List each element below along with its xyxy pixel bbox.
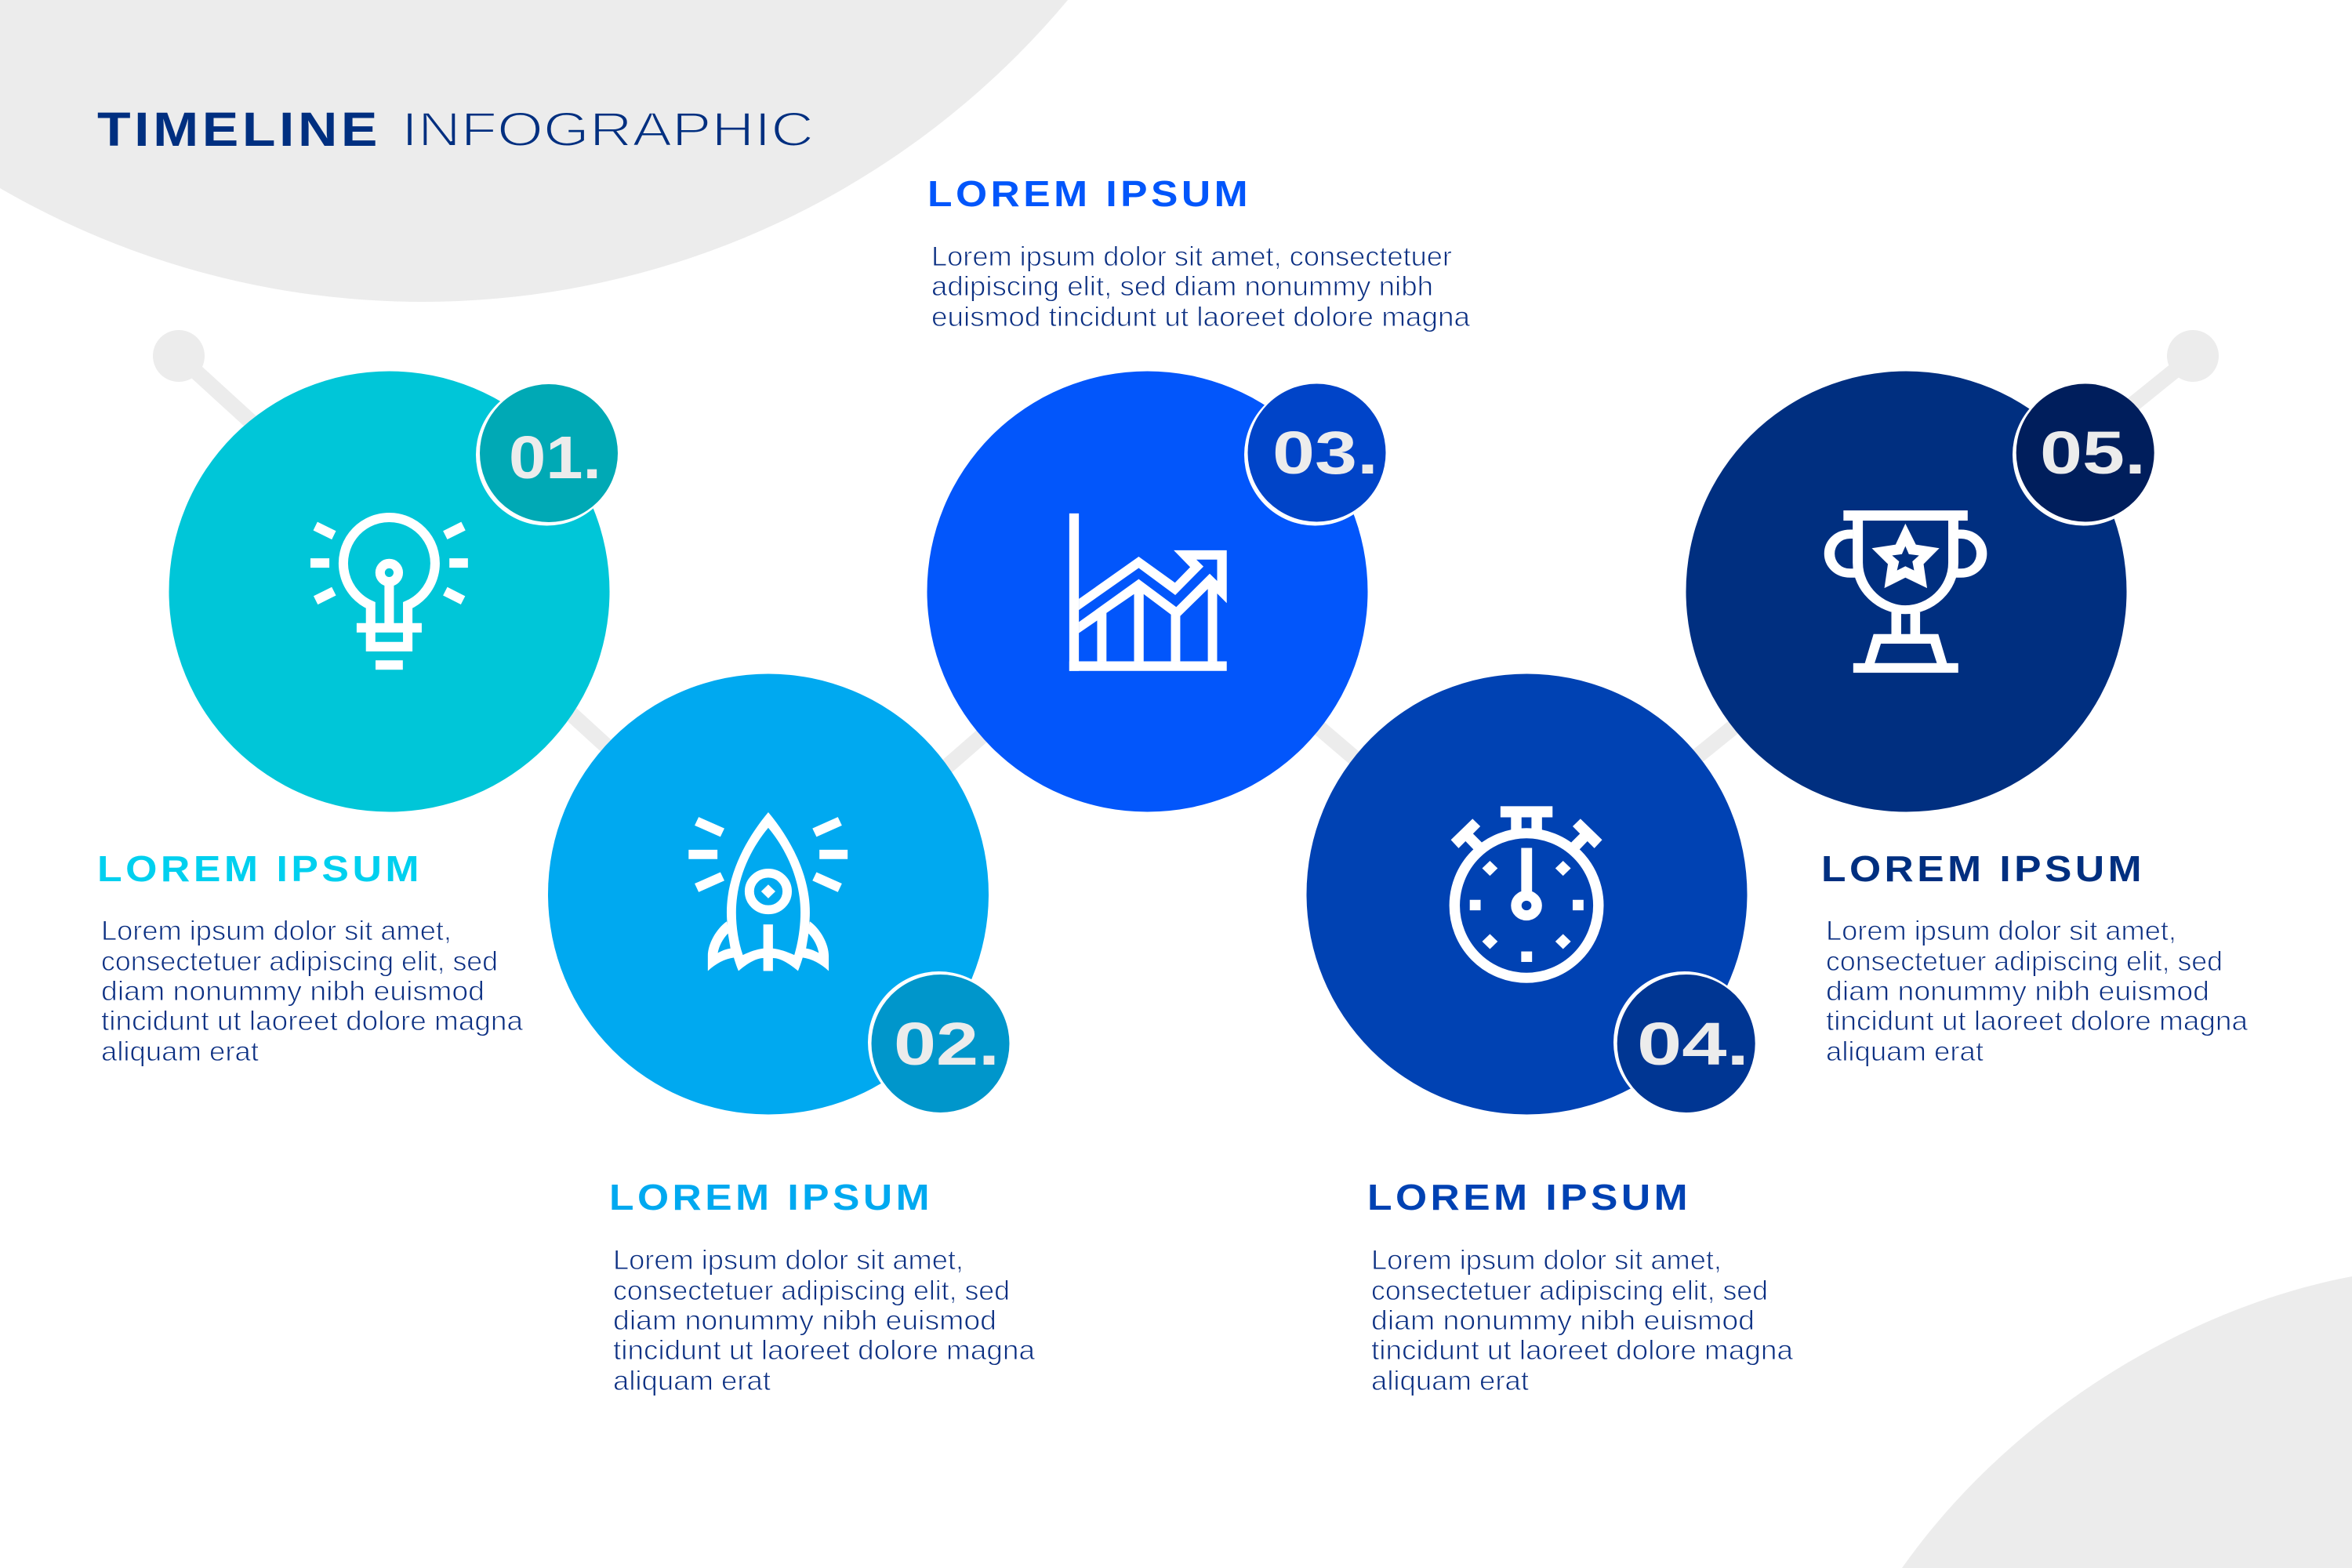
text block: step 4: tincidunt ut laoreet dolore magna: [1371, 1335, 1794, 1366]
badge 04: 04.: [1637, 1011, 1749, 1078]
text block: step 4: Lorem ipsum dolor sit amet,: [1371, 1245, 1722, 1276]
text block: step 2: tincidunt ut laoreet dolore magna: [613, 1335, 1036, 1366]
step 3 circle: [927, 372, 1367, 812]
icon: light bulb: [310, 517, 468, 665]
title: INFOGRAPHIC: [401, 103, 814, 156]
text block: step 2: LOREM IPSUM: [609, 1177, 933, 1218]
text block: step 4: LOREM IPSUM: [1367, 1177, 1691, 1218]
text block: step 3: Lorem ipsum dolor sit amet, consectetuer: [931, 241, 1452, 272]
panel: step 5: [1686, 372, 2154, 812]
text block: step 3: adipiscing elit, sed diam nonummy nibh: [931, 271, 1433, 302]
step 5 circle: [1686, 372, 2126, 812]
badge 01: 01.: [509, 424, 601, 492]
text block: step 5: consectetuer adipiscing elit, sed: [1826, 946, 2223, 977]
badge 02: 02.: [894, 1011, 1000, 1078]
text block: step 1: tincidunt ut laoreet dolore magna: [101, 1006, 524, 1036]
text block: step 1: [97, 848, 524, 1067]
text block: step 5: aliquam erat: [1826, 1036, 1984, 1067]
panel: step 2: [548, 674, 1010, 1115]
text block: step 3: [927, 173, 1471, 332]
badge 02: [868, 971, 1010, 1113]
text block: step 5: LOREM IPSUM: [1821, 848, 2145, 889]
text block: step 3: LOREM IPSUM: [927, 173, 1251, 214]
text block: step 1: LOREM IPSUM: [97, 848, 423, 889]
icon: growth chart: [1069, 514, 1227, 671]
text block: step 5: diam nonummy nibh euismod: [1826, 976, 2209, 1007]
title: TIMELINE: [97, 103, 381, 156]
icon: stopwatch: [1451, 806, 1602, 978]
text block: step 2: consectetuer adipiscing elit, sed: [613, 1276, 1010, 1306]
badge 04: [1613, 971, 1755, 1113]
badge 03: [1244, 384, 1386, 525]
step 1 circle: [169, 372, 610, 812]
badge 05: 05.: [2040, 419, 2146, 487]
background shape: top left: [0, 0, 1068, 302]
text block: step 4: consectetuer adipiscing elit, sed: [1371, 1276, 1768, 1306]
text block: step 1: aliquam erat: [101, 1036, 259, 1067]
step 2 circle: [548, 674, 989, 1115]
badge 03: 03.: [1272, 419, 1378, 487]
text block: step 3: euismod tincidunt ut laoreet dolore magna: [931, 302, 1471, 332]
text block: step 4: diam nonummy nibh euismod: [1371, 1305, 1755, 1336]
title: [97, 103, 814, 156]
text block: step 5: [1821, 848, 2249, 1067]
text block: step 2: Lorem ipsum dolor sit amet,: [613, 1245, 964, 1276]
icon: rocket: [688, 812, 848, 971]
icon: trophy: [1829, 510, 1982, 673]
badge 05: [2013, 384, 2154, 525]
step 4 circle: [1306, 674, 1747, 1115]
text block: step 4: aliquam erat: [1371, 1366, 1529, 1396]
background shape: bottom right: [1902, 1276, 2352, 1568]
text block: step 4: [1367, 1177, 1794, 1396]
badge 01: [476, 384, 618, 525]
text block: step 1: consectetuer adipiscing elit, sed: [101, 946, 498, 977]
text block: step 2: diam nonummy nibh euismod: [613, 1305, 996, 1336]
timeline connector: [153, 330, 2219, 894]
text block: step 1: diam nonummy nibh euismod: [101, 976, 485, 1007]
panel: step 1: [169, 372, 618, 812]
text block: step 1: Lorem ipsum dolor sit amet,: [101, 916, 452, 946]
panel: step 3: [927, 372, 1386, 812]
text block: step 5: tincidunt ut laoreet dolore magna: [1826, 1006, 2249, 1036]
text block: step 2: [609, 1177, 1036, 1396]
panel: step 4: [1306, 674, 1755, 1115]
text block: step 2: aliquam erat: [613, 1366, 771, 1396]
text block: step 5: Lorem ipsum dolor sit amet,: [1826, 916, 2176, 946]
